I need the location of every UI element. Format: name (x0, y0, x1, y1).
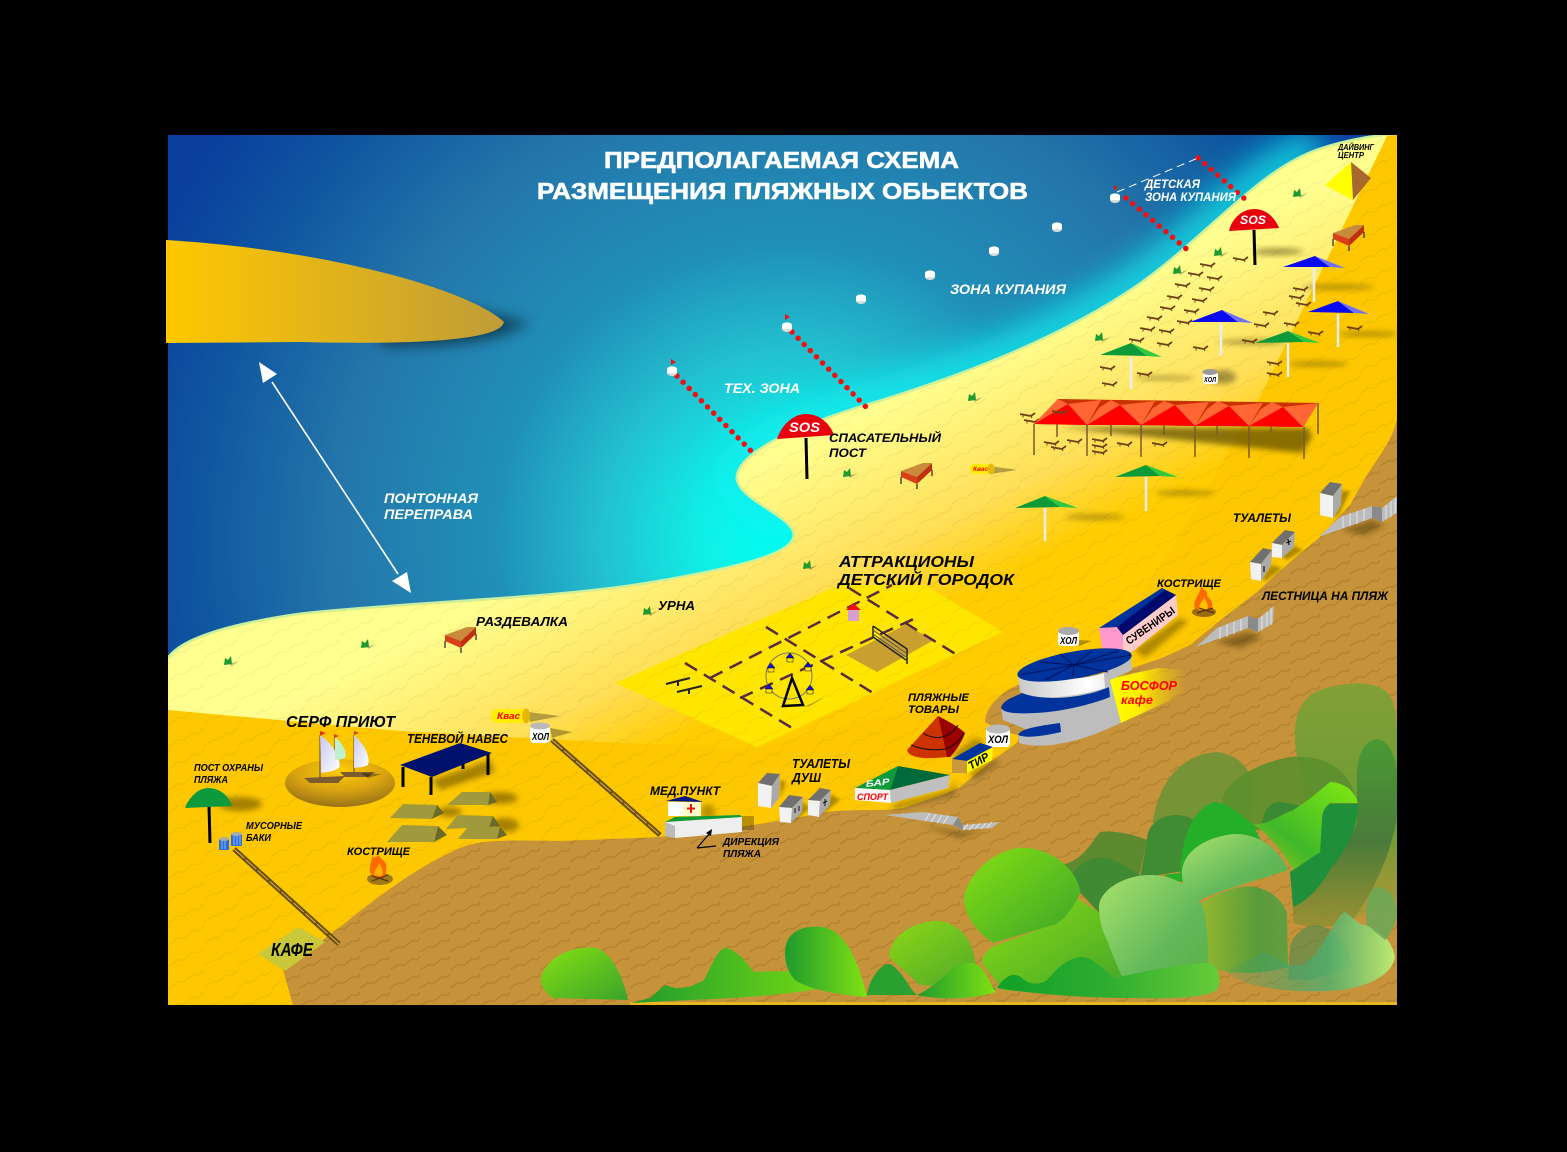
label: beach goods (908, 692, 970, 716)
changing cabins (445, 225, 1364, 653)
label: first aid: МЕД.ПУНКТ (650, 784, 722, 798)
label: management: ДИРЕКЦИЯ (722, 837, 780, 848)
label: Bosphorus cafe: кафе (1121, 693, 1153, 707)
attractions zone (615, 585, 1003, 747)
bar and sports shop: СПОРТ (857, 792, 889, 802)
label: pontoon crossing: ПОНТОННАЯ (384, 490, 479, 506)
label: attractions: АТТРАКЦИОНЫ (838, 554, 975, 571)
label: swimming zone: ЗОНА КУПАНИЯ (950, 281, 1067, 297)
SOS rescue post north (1229, 209, 1305, 265)
campfire east (1192, 586, 1216, 617)
souvenir shop: СУВЕНИРЫ (1124, 605, 1178, 647)
first aid post (666, 796, 715, 820)
label: rescue post: ПОСТ (829, 446, 868, 460)
label: beach goods: ПЛЯЖНЫЕ (908, 692, 970, 704)
kvas stand north: Квас (973, 466, 988, 473)
loungers (1020, 257, 1362, 424)
shooting gallery: ТИР (966, 751, 992, 773)
volleyball net (873, 626, 907, 664)
label: shade canopy: ТЕНЕВОЙ НАВЕС (407, 730, 509, 746)
label: trash bins: БАКИ (246, 833, 272, 844)
far shore spit (166, 240, 530, 345)
SOS rescue post (777, 414, 834, 479)
label: guard post: ПОСТ ОХРАНЫ (194, 763, 264, 774)
stairs (885, 496, 1397, 838)
label: children's swim zone (1144, 177, 1236, 204)
umbrellas (1015, 256, 1398, 541)
pale sand zone (168, 120, 1397, 1005)
sand base (168, 135, 1397, 1005)
label: bin: УРНА (658, 598, 695, 613)
label: guard post (194, 763, 264, 786)
map (168, 120, 1400, 1005)
SOS rescue post: SOS (789, 419, 821, 435)
label: children's swim zone: ДЕТСКАЯ (1144, 177, 1200, 191)
swim zone markers (667, 158, 1246, 452)
surf shelter (285, 731, 395, 807)
WC by shooting gallery: ХОЛ (987, 734, 1008, 746)
label: children's swim zone: ЗОНА КУПАНИЯ (1145, 190, 1236, 204)
litter bins (224, 188, 1308, 666)
title: ПРЕДПОЛАГАЕМАЯ СХЕМА (604, 147, 959, 173)
boardwalks (234, 740, 660, 944)
kvas stand west: Квас (497, 711, 521, 722)
beach management building (665, 815, 754, 838)
WC small (1202, 369, 1236, 384)
brown hillside (283, 420, 1397, 1005)
label: surf shelter: СЕРФ ПРИЮТ (286, 714, 396, 731)
cafe diamond: КАФЕ (271, 940, 314, 960)
diving centre (1325, 143, 1375, 200)
bottom edge line (630, 1002, 1397, 1005)
label: management: ПЛЯЖА (723, 849, 761, 860)
title: РАЗМЕЩЕНИЯ ПЛЯЖНЫХ ОБЬЕКТОВ (537, 178, 1028, 204)
WC west (530, 722, 572, 743)
WC by shooting gallery (986, 724, 1010, 747)
label: Bosphorus cafe: БОСФОР (1121, 678, 1177, 693)
cafe diamond (258, 927, 325, 971)
dashed paths (685, 585, 957, 728)
label: pontoon crossing (384, 490, 479, 522)
management arrow (697, 829, 716, 848)
volleyball court (846, 625, 934, 672)
diving centre: ЦЕНТР (1338, 151, 1365, 160)
label: attractions (836, 554, 1015, 589)
trash bins (219, 832, 242, 850)
SOS rescue post north: SOS (1240, 213, 1266, 227)
label: toilets shower (791, 756, 851, 785)
toilets east (1250, 482, 1350, 581)
WC west: ХОЛ (531, 732, 550, 743)
kvas stand west (491, 708, 560, 724)
label: pontoon crossing: ПЕРЕПРАВА (384, 506, 473, 522)
WC near cafe: ХОЛ (1059, 636, 1078, 647)
sea (168, 135, 1373, 656)
label: rescue post (829, 429, 941, 460)
label: trash bins: МУСОРНЫЕ (246, 821, 302, 832)
label: campfire west: КОСТРИЩЕ (347, 846, 411, 858)
label: guard post: ПЛЯЖА (194, 775, 228, 786)
label: rescue post: СПАСАТЕЛЬНЫЙ (829, 429, 941, 445)
swings (666, 678, 702, 694)
campfire west (367, 856, 393, 885)
hillside texture (283, 420, 1397, 1005)
label: campfire east: КОСТРИЩЕ (1157, 578, 1222, 590)
trees (541, 683, 1400, 1003)
shooting gallery (952, 743, 1000, 780)
label: attractions: ДЕТСКИЙ ГОРОДОК (836, 569, 1015, 589)
label: changing room: РАЗДЕВАЛКА (476, 614, 568, 629)
souvenir shop (1099, 588, 1188, 658)
bar and sports shop (855, 766, 956, 810)
shade canopy (400, 743, 495, 795)
kvas stand north (970, 464, 1017, 474)
label: toilets shower: ТУАЛЕТЫ (792, 756, 851, 771)
label: toilets shower: ДУШ (791, 770, 821, 785)
big awning (1034, 399, 1318, 459)
label: management (722, 837, 780, 860)
beach goods pyramid (907, 716, 985, 762)
label: beach goods: ТОВАРЫ (908, 704, 960, 716)
ferris wheel (765, 653, 825, 707)
tents (387, 792, 519, 842)
title (537, 147, 1028, 204)
toilets and shower (758, 773, 840, 823)
diving centre: ДАЙВИНГ (1337, 143, 1375, 152)
label: trash bins (246, 821, 302, 844)
label: toilets east: ТУАЛЕТЫ (1233, 511, 1292, 525)
guard post umbrella (185, 788, 262, 843)
bar and sports shop: БАР (865, 776, 891, 789)
WC near cafe (1058, 627, 1092, 647)
label: Bosphorus cafe (1121, 678, 1177, 707)
WC small: ХОЛ (1203, 377, 1216, 384)
kiosk (846, 603, 861, 621)
Bosphorus cafe (1001, 642, 1186, 746)
label: stairs to beach: ЛЕСТНИЦА НА ПЛЯЖ (1261, 589, 1389, 603)
pontoon arrow (259, 362, 411, 593)
label: technical zone: ТЕХ. ЗОНА (724, 380, 800, 396)
